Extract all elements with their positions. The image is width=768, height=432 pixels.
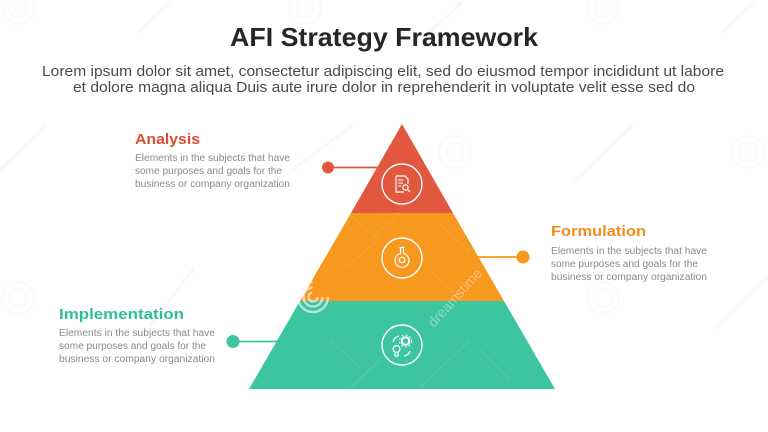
text block: implementation bbox=[59, 328, 215, 365]
text block: formulation: business or company organization bbox=[551, 272, 707, 283]
heading: implementation: Implementation bbox=[59, 306, 184, 323]
panel: formulation bbox=[478, 223, 707, 283]
panel: implementation bbox=[59, 306, 279, 365]
text block: implementation: some purposes and goals for the bbox=[59, 341, 206, 352]
text block: formulation bbox=[551, 246, 707, 283]
text block: analysis: business or company organization bbox=[135, 179, 290, 190]
watermark text: dreamstime bbox=[424, 265, 485, 330]
heading: formulation: Formulation bbox=[551, 223, 646, 240]
background watermark bbox=[0, 0, 768, 328]
subtitle text: et dolore magna aliqua Duis aute irure dolor in reprehenderit in voluptate velit esse sed do bbox=[73, 80, 695, 96]
connector: implementation bbox=[226, 335, 279, 348]
text block: implementation: business or company organization bbox=[59, 354, 215, 365]
text block: formulation: Elements in the subjects that have bbox=[551, 246, 707, 257]
subtitle text: Lorem ipsum dolor sit amet, consectetur adipiscing elit, sed do eiusmod tempor incididunt ut labore bbox=[42, 64, 724, 80]
panel: pyramid bbox=[249, 124, 555, 389]
title: AFI Strategy Framework bbox=[230, 22, 539, 52]
subtitle text bbox=[42, 64, 724, 96]
icon: document with magnifier bbox=[382, 164, 422, 204]
text block: formulation: some purposes and goals for the bbox=[551, 259, 698, 270]
watermark swirl bbox=[298, 282, 328, 312]
heading: analysis: Analysis bbox=[135, 131, 200, 148]
text block: analysis bbox=[135, 153, 290, 190]
icon: idea and gear cycle bbox=[382, 325, 422, 365]
connector: analysis bbox=[322, 162, 378, 174]
connector: formulation bbox=[478, 250, 530, 264]
pyramid watermark lines bbox=[330, 210, 510, 388]
text block: analysis: some purposes and goals for the bbox=[135, 166, 282, 177]
pyramid tier: analysis bbox=[351, 124, 453, 213]
text block: implementation: Elements in the subjects that have bbox=[59, 328, 215, 339]
pyramid tier: implementation bbox=[249, 301, 555, 389]
text block: analysis: Elements in the subjects that have bbox=[135, 153, 290, 164]
panel: analysis bbox=[135, 131, 378, 190]
icon: flask bbox=[382, 238, 422, 278]
pyramid tier: formulation bbox=[300, 213, 504, 301]
